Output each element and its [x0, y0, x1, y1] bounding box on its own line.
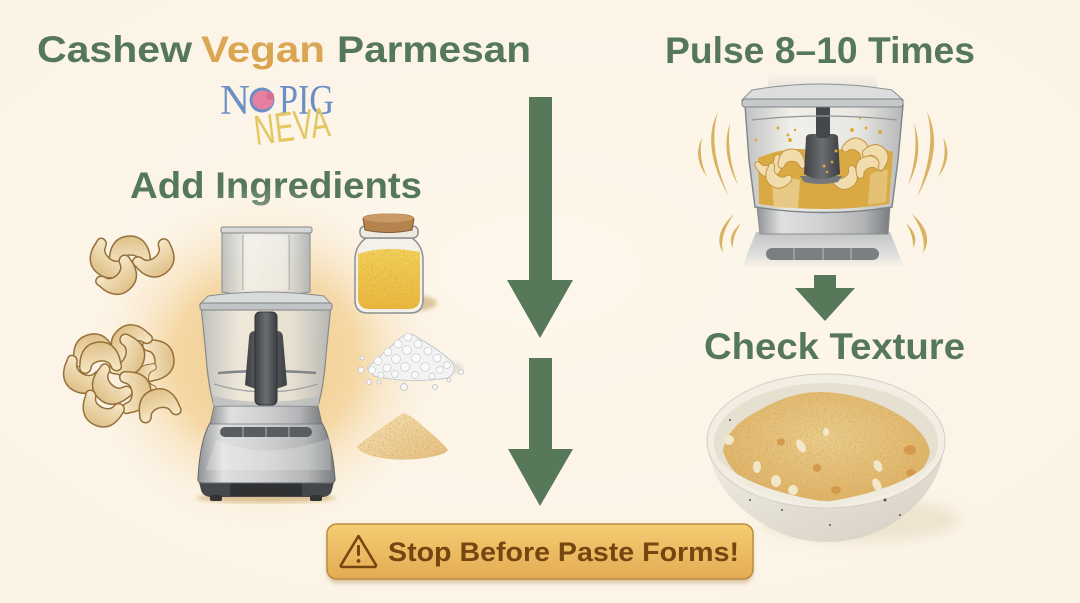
arrow: short down arrow [508, 358, 573, 506]
icon: food processor with ingredients [196, 227, 336, 503]
icon: food processor pulsing [742, 73, 904, 268]
logo: No Pig Neva: NEVA [251, 98, 333, 154]
logo: No Pig Neva [220, 78, 334, 154]
heading: Check Texture: Check Texture [704, 326, 965, 367]
logo: No Pig Neva: N [220, 78, 250, 124]
icon: warning triangle [341, 536, 376, 567]
arrow: long down arrow [507, 97, 573, 338]
icon: jar of nutritional yeast [355, 214, 437, 313]
icon: salt pile [358, 333, 464, 390]
title: Parmesan [337, 29, 531, 70]
title: Cashew [37, 29, 192, 70]
icon: bowl of parmesan [707, 374, 960, 542]
title [37, 29, 531, 70]
icon: vibration arcs [698, 112, 947, 253]
icon: lower cashews [55, 316, 182, 434]
icon: upper cashews [81, 235, 182, 303]
arrow: right down arrow [795, 275, 855, 321]
logo: No Pig Neva: PIG [279, 78, 334, 124]
heading: Add Ingredients: Add Ingredients [130, 165, 422, 206]
background glow [80, 185, 450, 535]
callout: Stop Before Paste Forms [327, 524, 753, 583]
title: Vegan [201, 29, 325, 70]
heading: Pulse 8–10 Times: Pulse 8–10 Times [665, 30, 975, 71]
callout: Stop Before Paste Forms: Stop Before Paste Forms! [388, 537, 739, 567]
icon: garlic powder pile [357, 413, 448, 460]
